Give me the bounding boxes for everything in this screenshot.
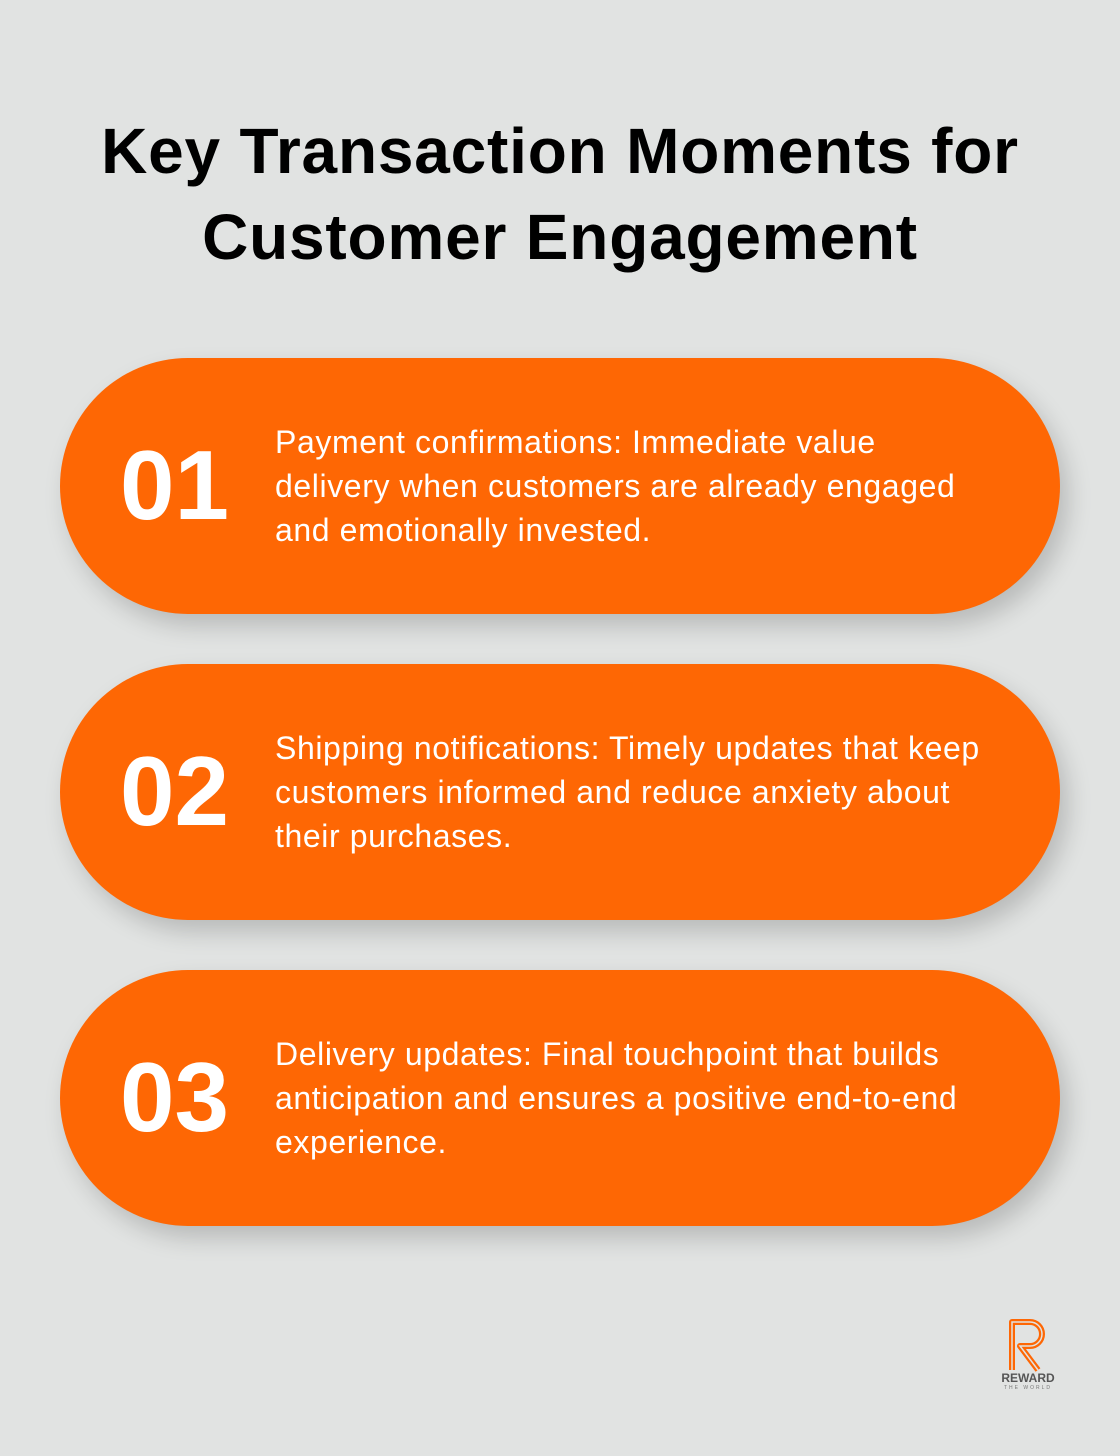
number 02: 02 — [120, 736, 229, 846]
text 03 — [275, 1036, 957, 1160]
text 02 — [275, 730, 980, 854]
number 03: 03 — [120, 1042, 229, 1152]
card 02 — [60, 664, 1060, 920]
text 02: their purchases. — [275, 818, 512, 854]
text 02: customers informed and reduce anxiety about — [275, 774, 950, 810]
text 03: experience. — [275, 1124, 447, 1160]
text 03: anticipation and ensures a positive end-to-end — [275, 1080, 957, 1116]
text 01: Payment confirmations: Immediate value — [275, 424, 876, 460]
logo: THE WORLD — [1004, 1385, 1052, 1391]
text 01: delivery when customers are already engaged — [275, 468, 955, 504]
logo: REWARD — [1001, 1371, 1055, 1385]
icon: R — [1009, 1319, 1045, 1372]
text 01: and emotionally invested. — [275, 512, 651, 548]
logo — [1001, 1319, 1055, 1391]
text 02: Shipping notifications: Timely updates that keep — [275, 730, 980, 766]
title: Key Transaction Moments for — [101, 115, 1019, 187]
title: Customer Engagement — [202, 201, 918, 273]
card 03 — [60, 970, 1060, 1226]
title — [101, 115, 1019, 273]
text 03: Delivery updates: Final touchpoint that builds — [275, 1036, 939, 1072]
number 01: 01 — [120, 430, 229, 540]
text 01 — [275, 424, 955, 548]
card 01 — [60, 358, 1060, 614]
